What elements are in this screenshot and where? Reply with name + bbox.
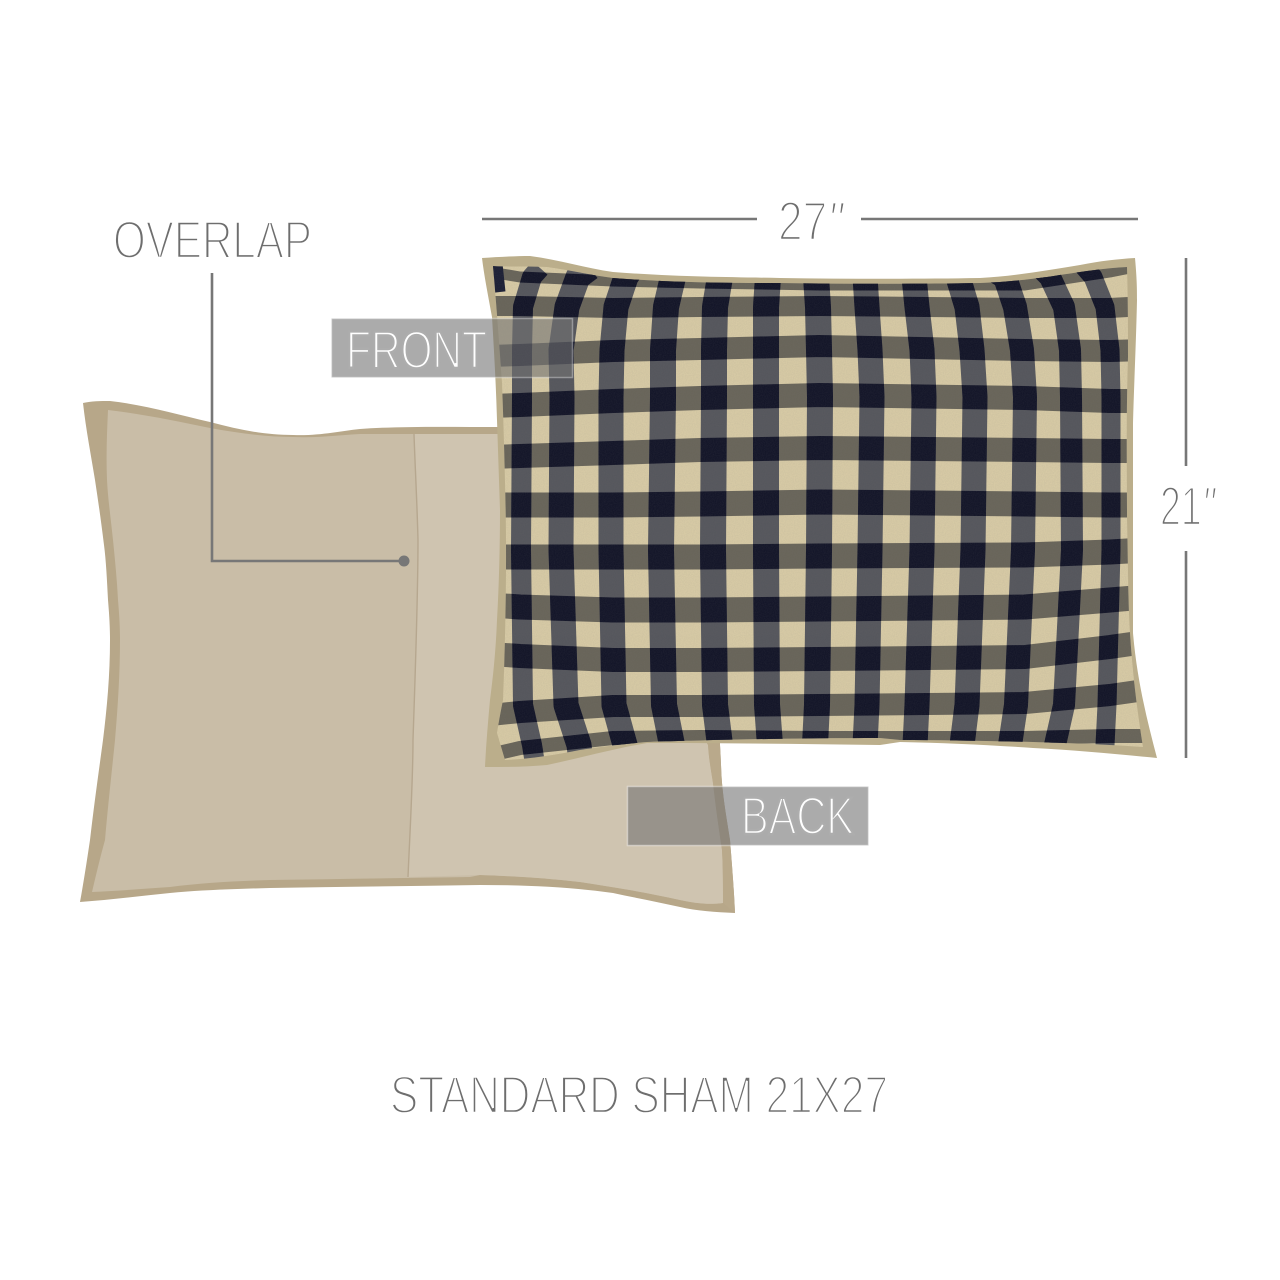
width line left	[482, 218, 757, 220]
width value: 27"	[778, 190, 845, 252]
gingham navy intersections	[490, 265, 1145, 755]
overlap label: OVERLAP	[113, 211, 312, 270]
back sham	[80, 401, 735, 913]
caption: STANDARD SHAM 21X27	[390, 1066, 888, 1125]
height line bottom	[1185, 551, 1187, 758]
gingham vertical bands	[521, 262, 1111, 770]
overlap callout	[113, 211, 410, 566]
overlap seam	[408, 434, 418, 877]
back label	[628, 786, 868, 846]
front label	[332, 318, 572, 380]
front sham	[480, 250, 1160, 770]
front sham flange	[482, 256, 1157, 767]
height line top	[1185, 258, 1187, 466]
overlap panel	[408, 434, 723, 904]
height value: 21"	[1160, 475, 1217, 537]
overlap leader line	[212, 273, 404, 561]
back label box	[628, 786, 868, 846]
gingham left fold	[497, 264, 500, 292]
front label text: FRONT	[346, 321, 487, 380]
back sham flange	[80, 401, 735, 913]
gingham horizontal bands	[490, 265, 1145, 755]
overlap leader dot	[398, 556, 410, 566]
front label box	[332, 318, 572, 378]
gingham check pattern	[480, 250, 1160, 770]
back sham right flange	[695, 700, 735, 913]
infographic: standard sham dimensions	[80, 202, 1216, 1112]
width line right	[861, 218, 1138, 220]
gingham fabric weave	[500, 268, 1138, 758]
back label text: BACK	[741, 787, 854, 846]
back sham fabric	[92, 410, 723, 904]
